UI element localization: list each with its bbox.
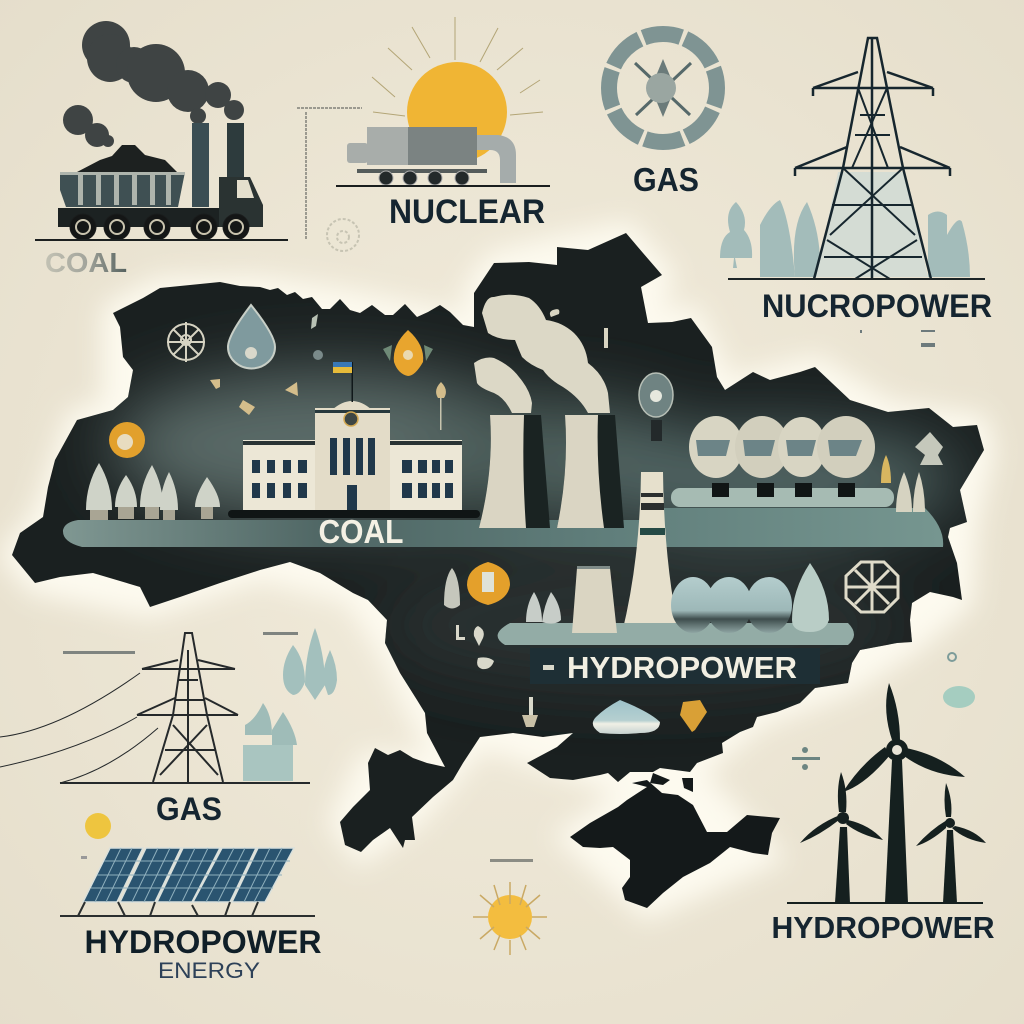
dashed bracket xyxy=(297,108,362,240)
faint gear xyxy=(327,219,359,251)
pylon lower left xyxy=(0,633,238,783)
right platform with dishes xyxy=(671,416,943,512)
coal panel xyxy=(35,21,288,241)
cooling towers xyxy=(474,295,624,528)
label: hydropower right: HYDROPOWER xyxy=(772,910,994,945)
small teal blob xyxy=(943,653,975,708)
small mark left of turbines xyxy=(792,747,820,770)
label: gas lower: GAS xyxy=(156,791,222,827)
government building xyxy=(228,401,480,518)
coal load xyxy=(77,145,177,172)
label: map hydropower: HYDROPOWER xyxy=(567,650,797,685)
label: coal: COAL xyxy=(45,247,127,278)
label: nuclear: NUCLEAR xyxy=(389,193,545,231)
map of Ukraine xyxy=(12,233,984,908)
smoke xyxy=(63,21,244,147)
orange flower icon xyxy=(383,330,433,376)
cloud xyxy=(593,700,660,734)
label band hydropower xyxy=(530,648,820,684)
droplet icon xyxy=(228,305,275,368)
lightbulb xyxy=(639,373,673,441)
trees near pylon xyxy=(720,200,970,277)
label: nucropower: NUCROPOWER xyxy=(762,288,992,324)
label: gas top: GAS xyxy=(633,161,699,198)
sun xyxy=(407,62,507,162)
yellow flower xyxy=(81,813,111,859)
map glow xyxy=(12,233,984,908)
orange coin xyxy=(109,422,145,458)
gear icon xyxy=(167,322,205,362)
pylon top xyxy=(795,38,950,279)
orange icon bottom xyxy=(680,700,707,732)
label: map coal: COAL xyxy=(318,513,404,550)
chimney xyxy=(622,472,679,633)
flag xyxy=(333,362,353,402)
small scattered icons xyxy=(210,309,608,430)
small marks under heading xyxy=(860,330,935,347)
pylon inner haze xyxy=(816,172,928,277)
Crimea xyxy=(570,780,780,908)
label: hydropower energy: HYDROPOWER xyxy=(84,924,322,960)
teal ground band xyxy=(63,508,943,547)
solar panels xyxy=(60,848,315,917)
small icons lower map xyxy=(456,625,554,727)
gas icon xyxy=(609,34,717,142)
trees lower left xyxy=(243,628,337,781)
left bullet trees xyxy=(86,463,220,520)
wind turbines xyxy=(787,683,986,904)
label: hydropower energy: ENERGY xyxy=(158,958,260,983)
small caption above sun xyxy=(490,859,533,862)
truck body xyxy=(60,172,185,207)
small caption text lower left xyxy=(63,632,298,654)
nuclear panel xyxy=(336,17,550,187)
orange icon lower xyxy=(444,562,510,608)
reactor cylinder xyxy=(367,127,477,165)
label: hydropower energy xyxy=(84,924,322,983)
sun icon xyxy=(473,882,547,955)
lower platform xyxy=(498,563,854,645)
pipe xyxy=(477,135,516,183)
wheel icon xyxy=(846,562,898,612)
